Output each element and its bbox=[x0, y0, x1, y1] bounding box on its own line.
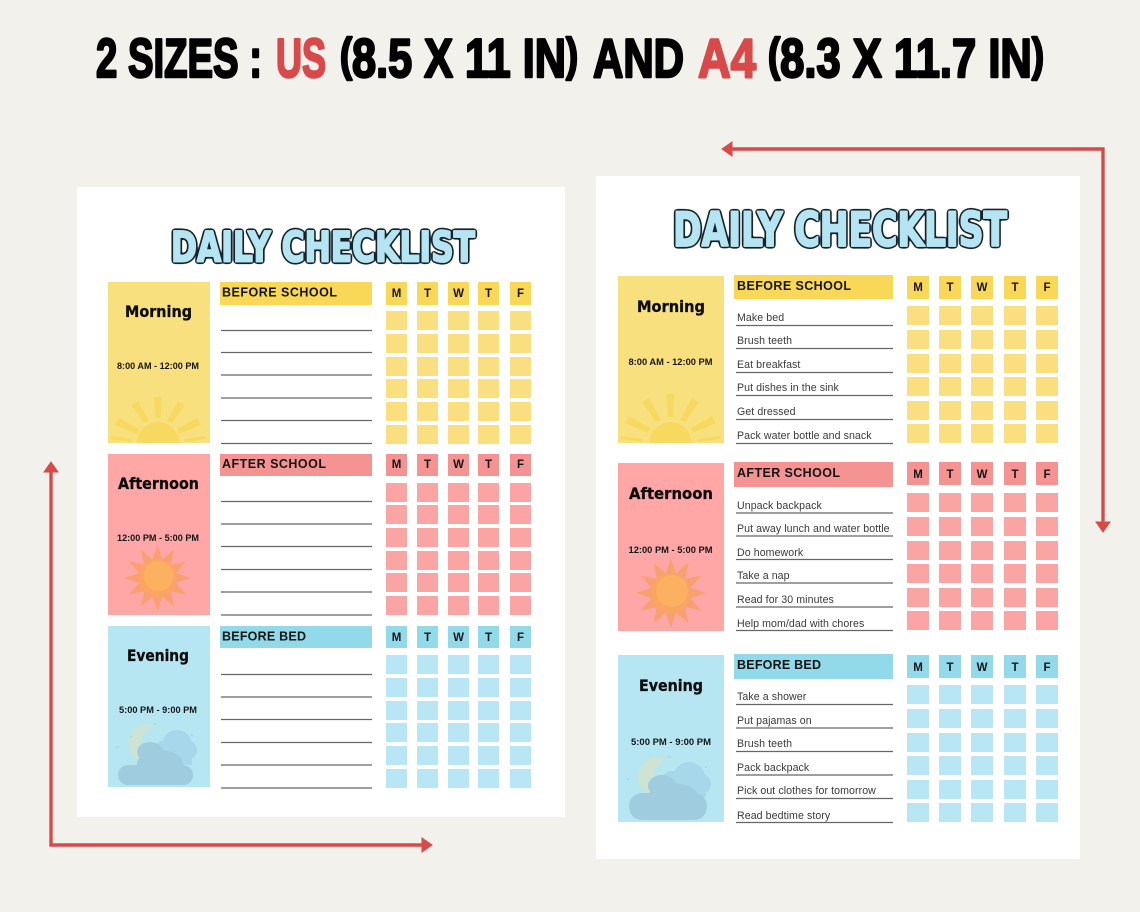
arrow: A4 page dimensions bbox=[722, 142, 1110, 532]
check boxes: afternoon bbox=[386, 483, 531, 615]
task list: before school: Eat breakfast bbox=[737, 359, 800, 371]
before school header: BEFORE SCHOOL bbox=[222, 286, 337, 300]
evening sidebar: Evening bbox=[127, 646, 189, 665]
day headers: morning A4 bbox=[907, 276, 1058, 299]
before bed header: BEFORE BED bbox=[222, 630, 306, 644]
day headers: afternoon A4: M bbox=[913, 469, 923, 481]
day headers: afternoon A4: T bbox=[1011, 469, 1019, 481]
task list: before bed: Brush teeth bbox=[737, 738, 792, 750]
check boxes: morning A4 bbox=[907, 306, 1058, 443]
title: A4 bbox=[698, 27, 756, 89]
title: 2 SIZES : bbox=[96, 27, 262, 89]
day headers: evening: W bbox=[453, 632, 464, 644]
task list: after school: Take a nap bbox=[737, 570, 790, 582]
afternoon sidebar: 12:00 PM - 5:00 PM bbox=[117, 533, 199, 544]
after school header A4 bbox=[734, 462, 893, 487]
day headers: evening: T bbox=[485, 632, 492, 644]
before school header A4 bbox=[734, 275, 893, 299]
morning sidebar: 8:00 AM - 12:00 PM bbox=[117, 361, 199, 372]
day headers: morning: T bbox=[424, 288, 431, 300]
morning sidebar bbox=[108, 282, 210, 443]
evening sidebar A4: Evening bbox=[639, 676, 703, 695]
writing lines: after school bbox=[221, 502, 372, 615]
day headers: morning A4: M bbox=[913, 282, 923, 294]
task list: before bed: Read bedtime story bbox=[737, 810, 831, 822]
day headers: evening: M bbox=[392, 632, 401, 644]
day headers: evening: F bbox=[517, 632, 524, 644]
title: ) bbox=[1032, 28, 1044, 80]
after school header: AFTER SCHOOL bbox=[222, 457, 326, 471]
day headers: afternoon A4 bbox=[907, 462, 1058, 485]
evening sidebar: 5:00 PM - 9:00 PM bbox=[119, 705, 197, 716]
before bed header bbox=[220, 626, 372, 648]
before school header A4: BEFORE SCHOOL bbox=[737, 279, 851, 293]
check boxes: evening A4 bbox=[907, 685, 1058, 822]
day headers: afternoon: W bbox=[453, 459, 464, 471]
task list: before school: Brush teeth bbox=[737, 335, 792, 347]
panel: A4 size checklist bbox=[596, 176, 1080, 859]
day headers: morning: W bbox=[453, 288, 464, 300]
task list: before school bbox=[736, 312, 893, 444]
title: 8.3 X 11.7 IN bbox=[780, 27, 1032, 89]
task list: before bed: Pack backpack bbox=[737, 762, 810, 774]
day headers: evening A4: F bbox=[1043, 662, 1051, 674]
afternoon sidebar A4: 12:00 PM - 5:00 PM bbox=[628, 545, 713, 556]
task list: before bed: Put pajamas on bbox=[737, 715, 812, 727]
day headers: evening A4: T bbox=[946, 662, 954, 674]
day headers: afternoon: T bbox=[424, 459, 431, 471]
day headers: afternoon: M bbox=[392, 459, 401, 471]
task list: after school bbox=[736, 500, 893, 630]
writing lines: before bed bbox=[221, 674, 372, 788]
afternoon sidebar: Afternoon bbox=[118, 474, 199, 493]
panel: US size checklist bbox=[77, 187, 565, 817]
task list: before school: Make bed bbox=[737, 312, 784, 324]
day headers: afternoon A4: F bbox=[1043, 469, 1051, 481]
task list: before bed: Pick out clothes for tomorrow bbox=[737, 785, 876, 797]
title: ) bbox=[566, 28, 578, 80]
day headers: morning: F bbox=[517, 288, 524, 300]
task list: after school: Help mom/dad with chores bbox=[737, 618, 864, 630]
afternoon sidebar bbox=[108, 454, 210, 615]
morning sidebar A4 bbox=[618, 276, 724, 443]
arrow: US page dimensions bbox=[44, 462, 432, 852]
heading: daily checklist US: DAILY CHECKLIST bbox=[171, 222, 475, 272]
icon: sun A4 bbox=[620, 394, 721, 443]
day headers: morning bbox=[386, 282, 531, 305]
heading: daily checklist A4: DAILY CHECKLIST bbox=[673, 203, 1007, 258]
writing lines: before school bbox=[221, 330, 372, 444]
day headers: evening A4: W bbox=[977, 662, 988, 674]
title: ( bbox=[768, 28, 781, 80]
task list: before school: Pack water bottle and snack bbox=[737, 430, 872, 442]
title: ( bbox=[340, 28, 353, 80]
icon: moon and clouds bbox=[116, 723, 197, 785]
evening sidebar A4 bbox=[618, 655, 724, 822]
after school header bbox=[220, 454, 372, 476]
day headers: evening A4: M bbox=[913, 662, 923, 674]
day headers: afternoon A4: T bbox=[946, 469, 954, 481]
day headers: morning: T bbox=[485, 288, 492, 300]
morning sidebar: Morning bbox=[125, 302, 192, 321]
day headers: afternoon: F bbox=[517, 459, 524, 471]
task list: after school: Put away lunch and water bottle bbox=[737, 523, 890, 535]
day headers: morning A4: T bbox=[946, 282, 954, 294]
day headers: afternoon bbox=[386, 454, 531, 476]
evening sidebar bbox=[108, 626, 210, 787]
day headers: morning A4: F bbox=[1043, 282, 1051, 294]
icon: afternoon sun A4 bbox=[636, 558, 706, 628]
after school header A4: AFTER SCHOOL bbox=[737, 466, 840, 480]
check boxes: afternoon A4 bbox=[907, 493, 1058, 630]
day headers: morning: M bbox=[392, 288, 401, 300]
title bbox=[96, 27, 1044, 89]
day headers: morning A4: T bbox=[1011, 282, 1019, 294]
before bed header A4: BEFORE BED bbox=[737, 658, 821, 672]
before bed header A4 bbox=[734, 654, 893, 679]
evening sidebar A4: 5:00 PM - 9:00 PM bbox=[631, 737, 711, 748]
morning sidebar A4: 8:00 AM - 12:00 PM bbox=[628, 357, 713, 368]
day headers: evening bbox=[386, 626, 531, 648]
task list: before bed: Take a shower bbox=[737, 691, 807, 703]
task list: before bed bbox=[736, 691, 893, 822]
title: AND bbox=[593, 27, 684, 89]
before school header bbox=[220, 282, 372, 305]
day headers: evening A4: T bbox=[1011, 662, 1019, 674]
task list: before school: Put dishes in the sink bbox=[737, 382, 839, 394]
task list: after school: Do homework bbox=[737, 547, 804, 559]
day headers: evening: T bbox=[424, 632, 431, 644]
day headers: afternoon: T bbox=[485, 459, 492, 471]
check boxes: evening bbox=[386, 655, 531, 788]
task list: before school: Get dressed bbox=[737, 406, 796, 418]
morning sidebar A4: Morning bbox=[637, 297, 705, 316]
check boxes: morning bbox=[386, 311, 531, 444]
title: US bbox=[276, 27, 326, 89]
afternoon sidebar A4 bbox=[618, 463, 724, 631]
icon: sun bbox=[110, 397, 206, 443]
task list: after school: Read for 30 minutes bbox=[737, 594, 834, 606]
title: 8.5 X 11 IN bbox=[352, 27, 566, 89]
day headers: afternoon A4: W bbox=[977, 469, 988, 481]
afternoon sidebar A4: Afternoon bbox=[629, 484, 713, 503]
day headers: evening A4 bbox=[907, 655, 1058, 678]
icon: afternoon sun bbox=[124, 545, 190, 611]
day headers: morning A4: W bbox=[977, 282, 988, 294]
icon: moon and clouds A4 bbox=[627, 756, 711, 820]
task list: after school: Unpack backpack bbox=[737, 500, 822, 512]
